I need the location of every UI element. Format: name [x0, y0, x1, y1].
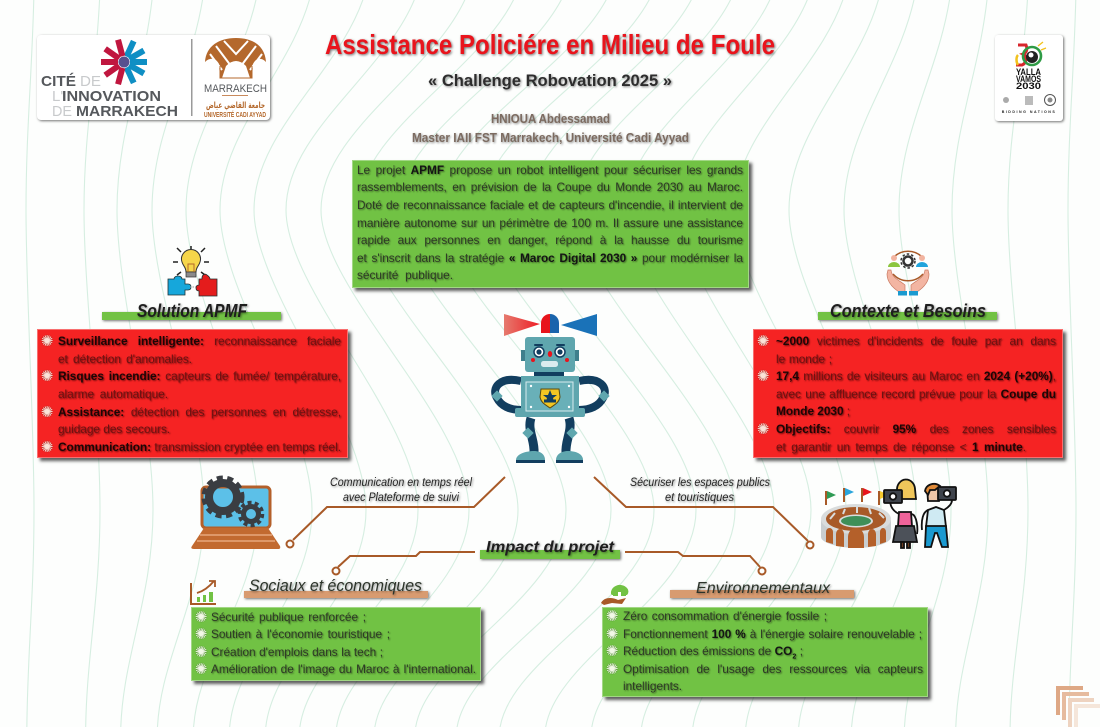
panel: impacts sociaux et économiques: Soutien à l'économie touristique ;	[211, 627, 390, 641]
connector: impact to environment	[625, 552, 766, 574]
panel: project introduction: et s'inscrit dans la stratégie « Maroc Digital 2030 » pour modérniser la	[357, 251, 743, 265]
panel: impacts sociaux et économiques: ✺	[195, 608, 207, 626]
logo: Cité de l'Innovation and Université Cadi Ayyad: INNOVATION	[62, 88, 161, 105]
panel: solution APMF: Risques incendie: capteurs de fumée/ température,	[58, 369, 341, 383]
panel: contexte et besoins: Objectifs: couvrir 95% des zones sensibles	[776, 422, 1056, 436]
panel: project introduction: manière autonome sur un périmètre de 100 m. Il assure une assistance	[357, 216, 743, 230]
panel: solution APMF: et détection d'anomalies.	[58, 352, 192, 366]
heading: Solution APMF: Solution APMF	[137, 301, 248, 321]
logo: Cité de l'Innovation and Université Cadi Ayyad: UNIVERSITÉ CADI AYYAD	[204, 110, 266, 119]
panel: solution APMF: Assistance: détection des personnes en détresse,	[58, 405, 341, 419]
panel: contexte et besoins: ~2000 victimes d'incidents de foule par an dans	[776, 334, 1056, 348]
panel: project introduction	[352, 160, 749, 288]
caption: communication: Communication en temps réel	[330, 477, 472, 489]
panel: contexte et besoins: le monde ;	[776, 352, 832, 366]
panel: solution APMF: ✺	[41, 403, 53, 421]
panel: contexte et besoins: Monde 2030 ;	[776, 404, 850, 418]
panel: solution APMF: ✺	[41, 332, 53, 350]
panel: contexte et besoins	[753, 329, 1063, 458]
heading: Impact du projet: Impact du projet	[486, 539, 615, 556]
panel: impacts sociaux et économiques: Création d'emplois dans la tech ;	[211, 645, 383, 659]
icon: context hands and gear	[887, 251, 929, 296]
icon: lightbulb and puzzle	[168, 246, 217, 296]
icon: stadium with flags and spectators	[821, 479, 956, 548]
panel: impacts environnementaux: intelligents.	[623, 679, 682, 693]
caption: public spaces: et touristiques	[665, 492, 734, 504]
panel: solution APMF: Surveillance intelligente: reconnaissance faciale	[58, 334, 341, 348]
logo: Yalla Vamos 2030: VAMOS	[1016, 74, 1041, 84]
panel: impacts environnementaux: Optimisation de l'usage des ressources via capteurs	[623, 662, 923, 676]
panel: solution APMF: Communication: transmission cryptée en temps réel.	[58, 440, 341, 454]
logo: Cité de l'Innovation and Université Cadi Ayyad: CITÉ	[41, 73, 76, 90]
logo: Yalla Vamos 2030: 2030	[1016, 81, 1041, 91]
panel: impacts environnementaux: Zéro consommation d'énergie fossile ;	[623, 609, 827, 623]
logo: Cité de l'Innovation and Université Cadi Ayyad: L'	[52, 88, 63, 105]
panel: solution APMF: ✺	[41, 367, 53, 385]
logo: Yalla Vamos 2030: BIDDING NATIONS	[1002, 110, 1056, 114]
logo: Yalla Vamos 2030: YALLA	[1016, 67, 1041, 77]
icon: growth chart	[191, 581, 216, 604]
panel: contexte et besoins: avec une affluence record prévue pour la Coupe du	[776, 387, 1056, 401]
panel: solution APMF: alarme automatique.	[58, 387, 168, 401]
panel: impacts environnementaux: Réduction des émissions de CO2 ;	[623, 644, 803, 660]
heading: Environnementaux	[670, 580, 854, 598]
logo: Cité de l'Innovation and Université Cadi Ayyad: DE	[52, 103, 72, 120]
connector: robot to laptop	[286, 477, 505, 548]
icon: corner brackets	[1058, 688, 1100, 727]
panel: contexte et besoins: et garantir un temps de réponse < 1 minute.	[776, 440, 1026, 454]
panel: project introduction: rassemblements, en prévision de la Coupe du Monde 2030 au Maroc.	[357, 180, 743, 194]
connector: impact to social	[332, 552, 475, 574]
panel: impacts sociaux et économiques: ✺	[195, 625, 207, 643]
panel: solution APMF: guidage des secours.	[58, 422, 170, 436]
panel: impacts environnementaux: Fonctionnement 100 % à l'énergie solaire renouvelable ;	[623, 627, 922, 641]
panel: impacts environnementaux: ✺	[606, 642, 618, 660]
heading: Contexte et Besoins: Contexte et Besoins	[830, 301, 986, 321]
panel: contexte et besoins: 17,4 millions de visiteurs au Maroc en 2024 (+20%),	[776, 369, 1056, 383]
panel: contexte et besoins: ✺	[757, 332, 769, 350]
icon: laptop with gears	[191, 478, 280, 549]
caption: communication: avec Plateforme de suivi	[343, 492, 459, 504]
panel: solution APMF	[37, 329, 348, 458]
panel: impacts environnementaux: ✺	[606, 660, 618, 678]
logo: Cité de l'Innovation and Université Cadi Ayyad: DE	[80, 73, 101, 90]
panel: project introduction: Doté de reconnaissance faciale et de capteurs d'incendie, il intervient de	[357, 198, 743, 212]
panel: impacts environnementaux: ✺	[606, 607, 618, 625]
icon: hand holding tree	[601, 585, 628, 605]
robot illustration	[491, 314, 610, 463]
panel: contexte et besoins: ✺	[757, 420, 769, 438]
panel: impacts sociaux et économiques: ✺	[195, 660, 207, 678]
panel: solution APMF: ✺	[41, 438, 53, 456]
logo: Yalla Vamos 2030	[995, 35, 1063, 121]
panel: impacts sociaux et économiques: Amélioration de l'image du Maroc à l'international.	[211, 662, 476, 676]
connector: robot to stadium	[594, 477, 814, 548]
panel: impacts sociaux et économiques	[191, 607, 481, 681]
affiliation: Master IAII FST Marrakech, Université Cadi Ayyad	[412, 130, 689, 145]
heading: Sociaux et économiques: Sociaux et économiques	[249, 577, 422, 595]
title: Assistance Policiére en Milieu de Foule	[325, 29, 775, 60]
logo: Cité de l'Innovation and Université Cadi Ayyad: MARRAKECH	[76, 103, 178, 120]
author name: HNIOUA Abdessamad	[491, 111, 610, 126]
panel: impacts environnementaux: ✺	[606, 625, 618, 643]
logo: Cité de l'Innovation and Université Cadi Ayyad	[37, 35, 270, 120]
logo: Cité de l'Innovation and Université Cadi Ayyad: جامعة القاضي عياض	[206, 101, 265, 111]
logo: Cité de l'Innovation and Université Cadi Ayyad: MARRAKECH	[204, 83, 267, 95]
panel: impacts environnementaux	[602, 607, 928, 697]
heading: Environnementaux: Environnementaux	[696, 580, 831, 597]
panel: project introduction: sécurité publique.	[357, 268, 453, 282]
subtitle: « Challenge Robovation 2025 »	[428, 71, 672, 90]
panel: impacts sociaux et économiques: ✺	[195, 643, 207, 661]
panel: project introduction: rapide aux personnes en danger, répond à la hausse du tourisme	[357, 233, 743, 247]
panel: contexte et besoins: ✺	[757, 367, 769, 385]
caption: communication	[330, 477, 472, 504]
panel: impacts sociaux et économiques: Sécurité publique renforcée ;	[211, 610, 366, 624]
panel: project introduction: Le projet APMF propose un robot intelligent pour sécuriser les grands	[357, 163, 743, 177]
caption: public spaces: Sécuriser les espaces publics	[630, 477, 770, 489]
caption: public spaces	[630, 477, 770, 504]
